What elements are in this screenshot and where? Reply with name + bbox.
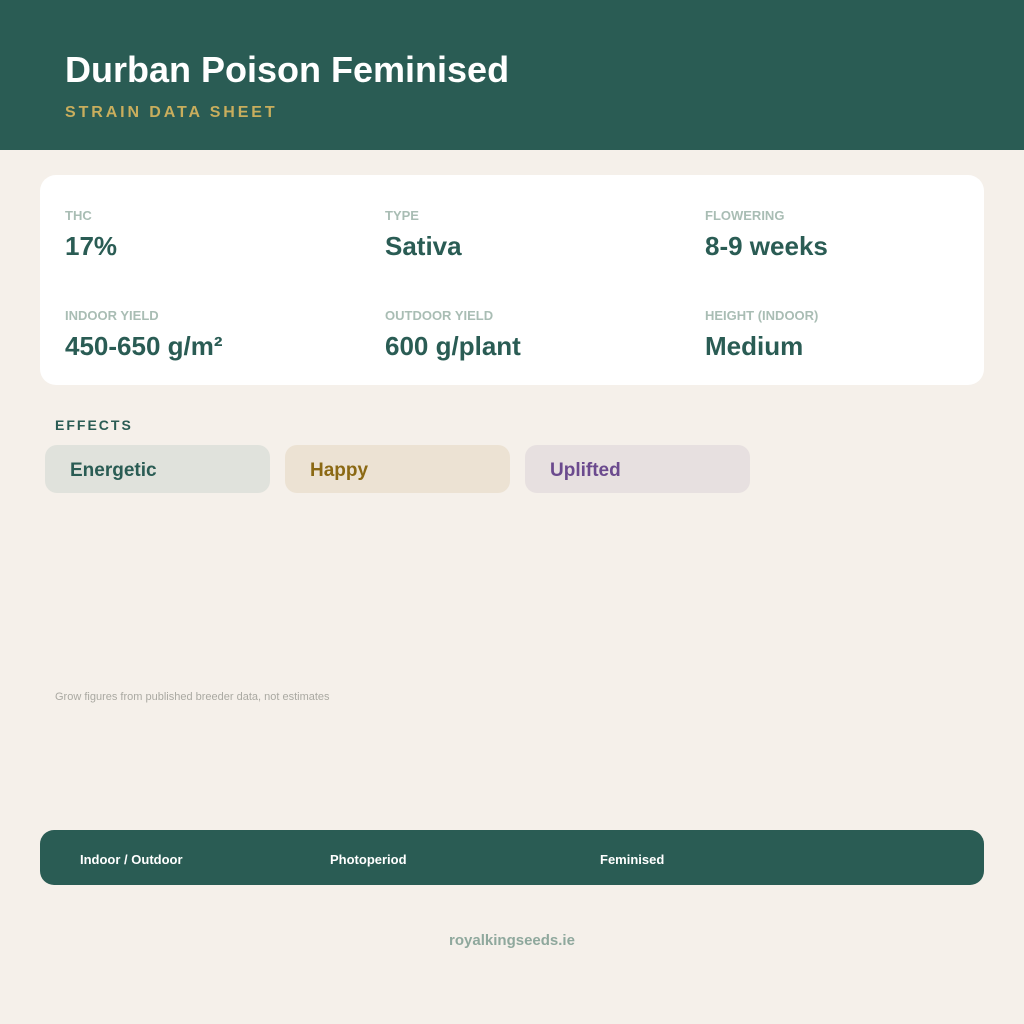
stat: indoor yield: [65, 308, 223, 361]
effect pill: happy: [285, 445, 510, 493]
effect pill: uplifted: [525, 445, 750, 493]
attribute: feminised: Feminised: [600, 852, 664, 867]
effect pill: happy: Happy: [310, 460, 368, 481]
stat: flowering: 8-9 weeks: [705, 231, 828, 261]
title: Durban Poison Feminised: [65, 49, 509, 90]
stat: height: Medium: [705, 331, 803, 361]
header band: [0, 0, 1024, 150]
subtitle: STRAIN DATA SHEET: [65, 104, 278, 121]
stat: type: Sativa: [385, 231, 462, 261]
attribute: photoperiod: Photoperiod: [330, 852, 407, 867]
stat: THC: 17%: [65, 231, 117, 261]
stat: flowering: [705, 208, 828, 261]
effects heading: EFFECTS: [55, 417, 133, 433]
stat: THC: [65, 208, 117, 261]
footer attribute bar: [40, 830, 984, 885]
source note: Grow figures from published breeder data, not estimates: [55, 691, 330, 703]
stat: type: [385, 208, 462, 261]
stat: outdoor yield: [385, 308, 521, 361]
attribute: environment: Indoor / Outdoor: [80, 852, 183, 867]
effect pill: energetic: [45, 445, 270, 493]
stat: height: [705, 308, 818, 361]
website: royalkingseeds.ie: [449, 932, 575, 949]
stat: THC: THC: [65, 208, 92, 223]
stat: flowering: FLOWERING: [705, 208, 784, 223]
stat: height: HEIGHT (INDOOR): [705, 308, 818, 323]
stat: outdoor yield: OUTDOOR YIELD: [385, 308, 493, 323]
effect pill: uplifted: Uplifted: [550, 460, 621, 481]
stat: indoor yield: 450-650 g/m²: [65, 331, 223, 361]
stat: indoor yield: INDOOR YIELD: [65, 308, 159, 323]
panel: strain stats: [40, 175, 984, 385]
stat: type: TYPE: [385, 208, 419, 223]
stat: outdoor yield: 600 g/plant: [385, 331, 521, 361]
effect pill: energetic: Energetic: [70, 460, 157, 481]
